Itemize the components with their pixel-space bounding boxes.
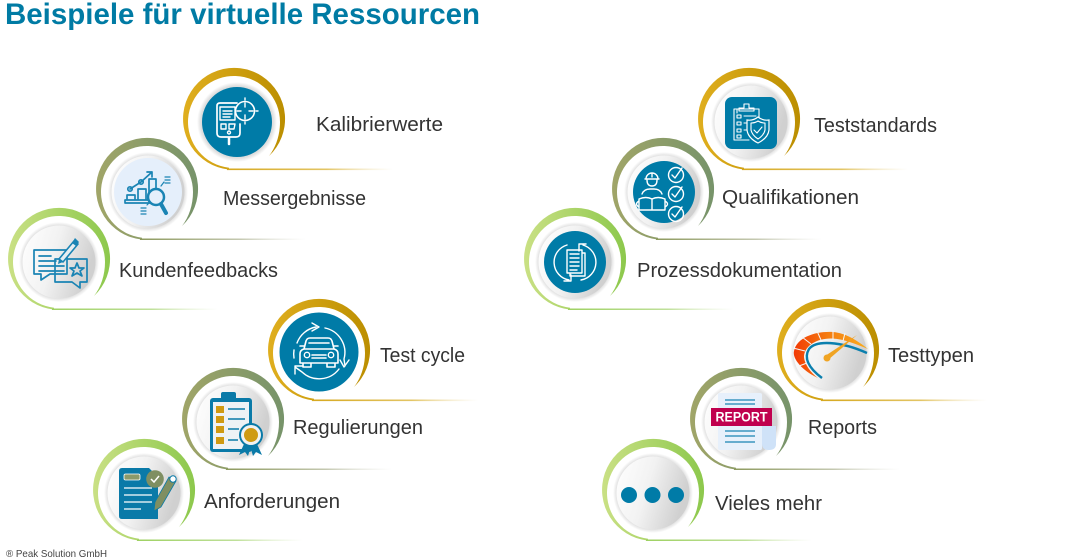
label: Reports [808, 417, 877, 439]
label: Kalibrierwerte [316, 114, 443, 136]
panel: Kundenfeedbacks [8, 208, 278, 310]
panel: Vieles mehr [602, 439, 822, 541]
label: Teststandards [814, 115, 937, 137]
icon: speedometer [793, 330, 868, 378]
ring [698, 68, 908, 170]
label: Testtypen [888, 345, 974, 367]
icon: report sheet: REPORT [716, 410, 768, 424]
label: Messergebnisse [223, 188, 366, 210]
panel: Qualifikationen [612, 138, 859, 240]
icon: requirement document [119, 468, 176, 519]
ring [183, 68, 393, 170]
ring [268, 299, 478, 401]
label: Test cycle [380, 345, 465, 367]
icon: three dots [621, 487, 684, 503]
label: Qualifikationen [722, 187, 859, 209]
panel: Kalibrierwerte [183, 68, 443, 170]
label: Regulierungen [293, 417, 423, 439]
icon: report sheet [711, 393, 776, 450]
panel: Teststandards [698, 68, 937, 170]
label: Kundenfeedbacks [119, 260, 278, 282]
ring [8, 208, 218, 310]
ring [93, 439, 303, 541]
panel: Testtypen [777, 299, 987, 401]
ring [777, 299, 987, 401]
icon: measurement chart [114, 158, 182, 226]
panel: Anforderungen [93, 439, 340, 541]
panel: Test cycle [268, 299, 478, 401]
icon: calibration device [202, 87, 272, 157]
icon: feedback bubbles [34, 238, 87, 288]
ring [182, 368, 392, 470]
label: Prozessdokumentation [637, 260, 842, 282]
panel: Prozessdokumentation [524, 208, 842, 310]
ring [602, 439, 812, 541]
icon: clipboard with seal [210, 392, 263, 456]
ring [612, 138, 822, 240]
label: Anforderungen [204, 491, 340, 513]
ring [96, 138, 306, 240]
icon: document cycle [544, 231, 606, 293]
panel: Regulierungen [182, 368, 423, 470]
ring [690, 368, 900, 470]
icon: checklist with shield [725, 97, 777, 149]
label: Vieles mehr [715, 493, 822, 515]
panel: Reports [690, 368, 900, 470]
panel: Messergebnisse [96, 138, 366, 240]
ring [524, 208, 734, 310]
icon: car in cycle [280, 312, 358, 392]
icon: worker with checks [633, 161, 695, 223]
